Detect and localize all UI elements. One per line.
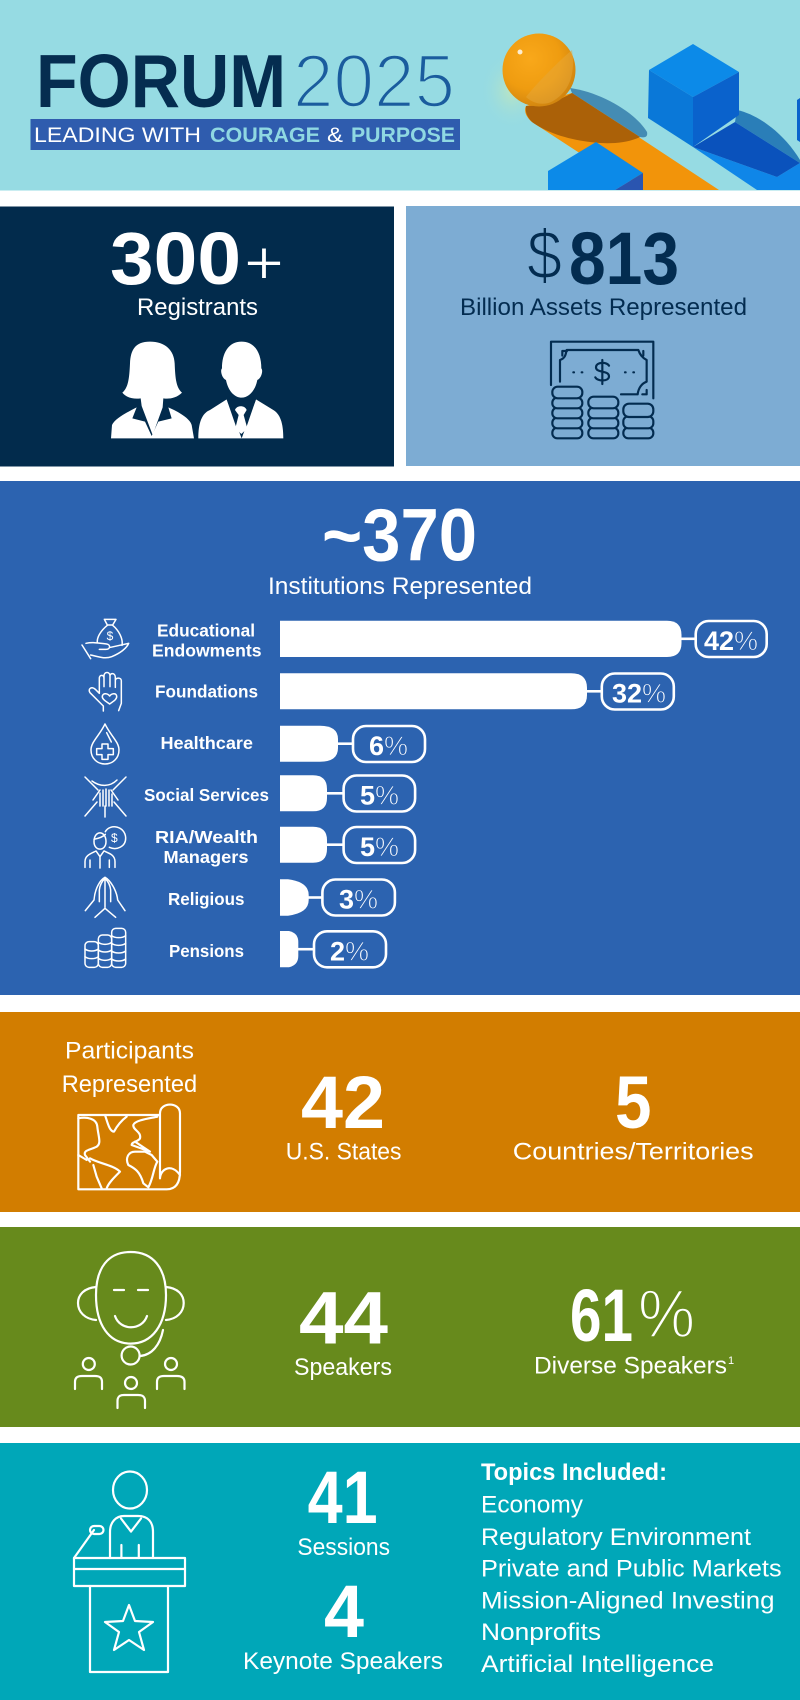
title: FORUM 2025: FORUM (36, 39, 286, 123)
stat: $813: $ (527, 216, 562, 294)
text block: topics: Economy (481, 1492, 583, 1519)
icon: cash and coins (551, 342, 653, 438)
text block: topics: Topics Included: (481, 1459, 667, 1486)
icon: praying hands (85, 877, 125, 917)
stat: $813 (527, 216, 679, 300)
panel: sessions (0, 1443, 800, 1700)
icon: hand with heart (89, 672, 121, 711)
stat: $813: 813 (569, 217, 679, 300)
row: Social Services 5% (85, 775, 415, 817)
panel: institutions (0, 481, 800, 995)
subtitle bar: COURAGE (210, 124, 320, 147)
stat: 42 U.S. States: U.S. States (286, 1139, 402, 1166)
subtitle bar: & (327, 124, 343, 147)
label: Institutions Represented: Institutions Represented (268, 573, 532, 600)
stat: 61% Diverse Speakers: Diverse Speakers (534, 1353, 727, 1380)
stat: 5 Countries/Territories (513, 1061, 754, 1166)
stat: 61% Diverse Speakers: % (638, 1276, 695, 1352)
stat: 300+: + (244, 229, 284, 298)
stat: 42 U.S. States (286, 1061, 402, 1166)
subtitle bar (30, 119, 460, 150)
panel: registrants (0, 206, 394, 466)
text block: topics (481, 1459, 782, 1678)
text block: topics: Artificial Intelligence (481, 1651, 714, 1678)
row: Pensions 2%: 2% (330, 936, 369, 966)
stat: 4 Keynote Speakers: 4 (324, 1570, 364, 1653)
stat: 44 Speakers (294, 1277, 392, 1381)
row: Healthcare 6%: 6% (369, 731, 408, 761)
row: Pensions 2% (85, 928, 386, 967)
heading: Participants Represented: Participants (65, 1037, 194, 1064)
row: Educational Endowments 42%: Endowments (152, 641, 262, 661)
stat: 61% Diverse Speakers: 1 (728, 1355, 734, 1367)
row: Religious 3%: Religious (168, 889, 245, 909)
row: Foundations 32%: Foundations (155, 682, 258, 702)
icon: speaker with headset and audience (75, 1252, 184, 1408)
stat: 41 Sessions: 41 (308, 1456, 378, 1539)
row: RIA/Wealth Managers 5%: 5% (360, 832, 399, 862)
icon: hand holding money bag (82, 619, 129, 659)
text block: topics: Mission-Aligned Investing (481, 1588, 774, 1615)
row: Religious 3% (85, 877, 395, 917)
row: RIA/Wealth Managers 5% (85, 827, 415, 868)
row: Religious 3%: 3% (339, 884, 378, 914)
stat: 61% Diverse Speakers (534, 1274, 734, 1380)
row: Foundations 32%: 32% (612, 678, 666, 708)
text block: topics: Private and Public Markets (481, 1556, 782, 1582)
row: Healthcare 6% (91, 724, 425, 764)
label: Billion Assets Represented: Billion Assets Represented (460, 294, 747, 321)
row: Educational Endowments 42% (82, 619, 767, 661)
illustration: ball and cubes (502, 34, 800, 190)
stat: 61% Diverse Speakers: 61 (570, 1274, 633, 1357)
stat: 300+: 300 (110, 217, 241, 300)
icon: hand holding money bag: $ (107, 629, 114, 643)
row: Social Services 5%: 5% (360, 780, 399, 810)
row: Foundations 32% (89, 672, 674, 711)
icon: two people (111, 342, 283, 438)
stat: 5 Countries/Territories: 5 (615, 1061, 652, 1144)
panel: assets (406, 206, 800, 466)
row: Educational Endowments 42%: Educational (157, 621, 255, 641)
text block: topics: Regulatory Environment (481, 1524, 751, 1551)
panel: speakers (0, 1227, 800, 1427)
row: Educational Endowments 42%: 42% (704, 626, 758, 656)
label: Registrants: Registrants (137, 294, 258, 321)
stat: 44 Speakers: Speakers (294, 1354, 392, 1381)
row: Pensions 2%: Pensions (169, 941, 244, 961)
icon: drop with cross (91, 724, 119, 764)
row: RIA/Wealth Managers 5%: RIA/Wealth (155, 827, 258, 847)
stat: 41 Sessions: Sessions (297, 1534, 390, 1561)
stat: ~370: ~370 (322, 494, 477, 576)
heading: Participants Represented (62, 1037, 197, 1098)
subtitle bar: LEADING WITH (34, 124, 201, 147)
banner (0, 0, 800, 190)
panel: participants (0, 1012, 800, 1212)
title: FORUM 2025 (36, 39, 455, 123)
subtitle bar: PURPOSE (351, 124, 455, 147)
icon: coin stacks (85, 928, 126, 967)
stat: 44 Speakers: 44 (299, 1277, 388, 1360)
stat: 42 U.S. States: 42 (301, 1061, 385, 1144)
icon: adviser with dollar (85, 827, 126, 868)
heading: Participants Represented: Represented (62, 1071, 197, 1098)
stat: 4 Keynote Speakers: Keynote Speakers (243, 1648, 443, 1675)
icon: speaker at podium (74, 1472, 185, 1672)
row: RIA/Wealth Managers 5%: Managers (164, 847, 249, 867)
icon: adviser with dollar: $ (111, 831, 118, 845)
icon: world map scroll (78, 1105, 180, 1189)
row: Social Services 5%: Social Services (144, 785, 269, 805)
title: FORUM 2025: 2025 (293, 39, 455, 123)
stat: 5 Countries/Territories: Countries/Territories (513, 1139, 754, 1166)
text block: topics: Nonprofits (481, 1619, 601, 1646)
stat: 4 Keynote Speakers (243, 1570, 443, 1675)
icon: joined hands (85, 777, 126, 817)
row: Healthcare 6%: Healthcare (160, 733, 253, 753)
